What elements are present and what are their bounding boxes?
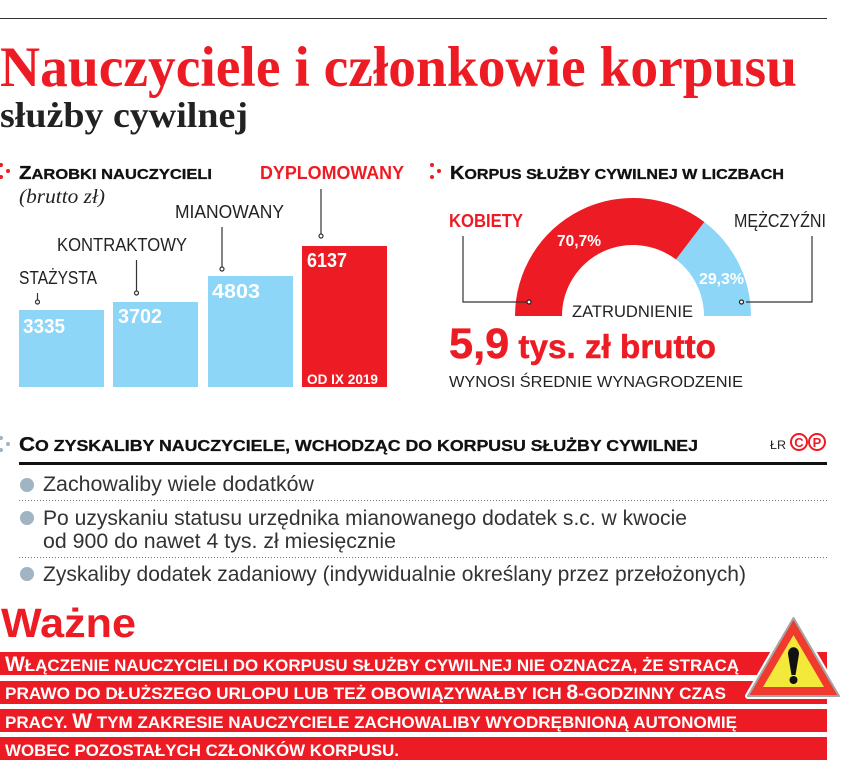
- bar: kontraktowy: KONTRAKTOWY: [57, 235, 187, 255]
- icon: warning triangle: [748, 618, 839, 696]
- credit: P: [813, 435, 822, 450]
- icon: section dots: [0, 163, 10, 179]
- bar: mianowany: [175, 202, 293, 387]
- list item 3: Zyskaliby dodatek zadaniowy (indywidualnie określany przez przełożonych): [43, 563, 746, 586]
- segment: men: 29,3%: [699, 271, 744, 288]
- bar chart: salaries: [19, 163, 404, 387]
- credit: ŁR: [770, 438, 786, 452]
- callout: men: MĘŻCZYŹNI: [734, 211, 826, 231]
- panel: what teachers would gain: [0, 434, 827, 586]
- bar: stażysta: [19, 268, 104, 387]
- heading: what teachers would gain: CO ZYSKALIBY NAUCZYCIELE, WCHODZĄC DO KORPUSU SŁUŻBY CYWILNEJ: [19, 434, 698, 456]
- list item 2: [20, 507, 687, 553]
- chart: employment half donut: [449, 198, 826, 321]
- big number: average salary: 5,9 tys. zł brutto: [449, 320, 716, 368]
- bar: dyplomowany: DYPLOMOWANY: [260, 163, 404, 183]
- credit: C: [794, 435, 804, 450]
- text strip 4: WOBEC POZOSTAŁYCH CZŁONKÓW KORPUSU.: [5, 741, 399, 760]
- list item 2: od 900 do nawet 4 tys. zł miesięcznie: [43, 530, 396, 553]
- bar: mianowany: 4803: [212, 280, 260, 303]
- icon: section dots: [430, 163, 441, 179]
- bar: mianowany: MIANOWANY: [175, 202, 284, 222]
- bar: dyplomowany: 6137: [307, 249, 347, 272]
- credit: [770, 434, 825, 452]
- icon: section dots: [0, 436, 10, 452]
- title: służby cywilnej: [0, 95, 248, 135]
- panel: civil service in numbers: [430, 163, 826, 391]
- bar: kontraktowy: [57, 235, 198, 387]
- bar: dyplomowany: OD IX 2019: [307, 372, 378, 387]
- callout: women: [449, 211, 531, 304]
- panel: important notice: [0, 600, 839, 760]
- heading: important: Ważne: [1, 600, 136, 646]
- heading: teacher earnings: ZAROBKI NAUCZYCIELI: [19, 163, 212, 183]
- title: [0, 36, 797, 135]
- title: Nauczyciele i członkowie korpusu: [0, 36, 797, 99]
- panel: teacher earnings: [0, 163, 404, 387]
- bar: kontraktowy: 3702: [118, 305, 162, 328]
- callout: men: [734, 211, 826, 304]
- segment: women: 70,7%: [557, 233, 601, 250]
- text strip 1: WŁĄCZENIE NAUCZYCIELI DO KORPUSU SŁUŻBY CYWILNEJ NIE OZNACZA, ŻE STRACĄ: [5, 653, 739, 676]
- heading: civil service in numbers: KORPUS SŁUŻBY CYWILNEJ W LICZBACH: [450, 163, 784, 183]
- bar: stażysta: 3335: [23, 315, 65, 338]
- bar: dyplomowany: [260, 163, 404, 387]
- text strip 4: [0, 737, 827, 760]
- segment: women: [515, 198, 704, 316]
- list item 2: Po uzyskaniu statusu urzędnika mianowanego dodatek s.c. w kwocie: [43, 507, 687, 530]
- subtitle: gross PLN: (brutto zł): [19, 186, 105, 208]
- bar: stażysta: STAŻYSTA: [19, 268, 97, 288]
- label: employment: ZATRUDNIENIE: [572, 303, 693, 321]
- callout: women: KOBIETY: [449, 211, 523, 231]
- caption: average salary: WYNOSI ŚREDNIE WYNAGRODZENIE: [449, 372, 743, 391]
- text strip 2: PRAWO DO DŁUŻSZEGO URLOPU LUB TEŻ OBOWIĄZYWAŁBY ICH 8-GODZINNY CZAS: [5, 681, 726, 704]
- text strip 3: PRACY. W TYM ZAKRESIE NAUCZYCIELE ZACHOWALIBY WYODRĘBNIONĄ AUTONOMIĘ: [5, 710, 737, 733]
- list item 1: Zachowaliby wiele dodatków: [43, 473, 315, 496]
- segment: men: [676, 222, 751, 316]
